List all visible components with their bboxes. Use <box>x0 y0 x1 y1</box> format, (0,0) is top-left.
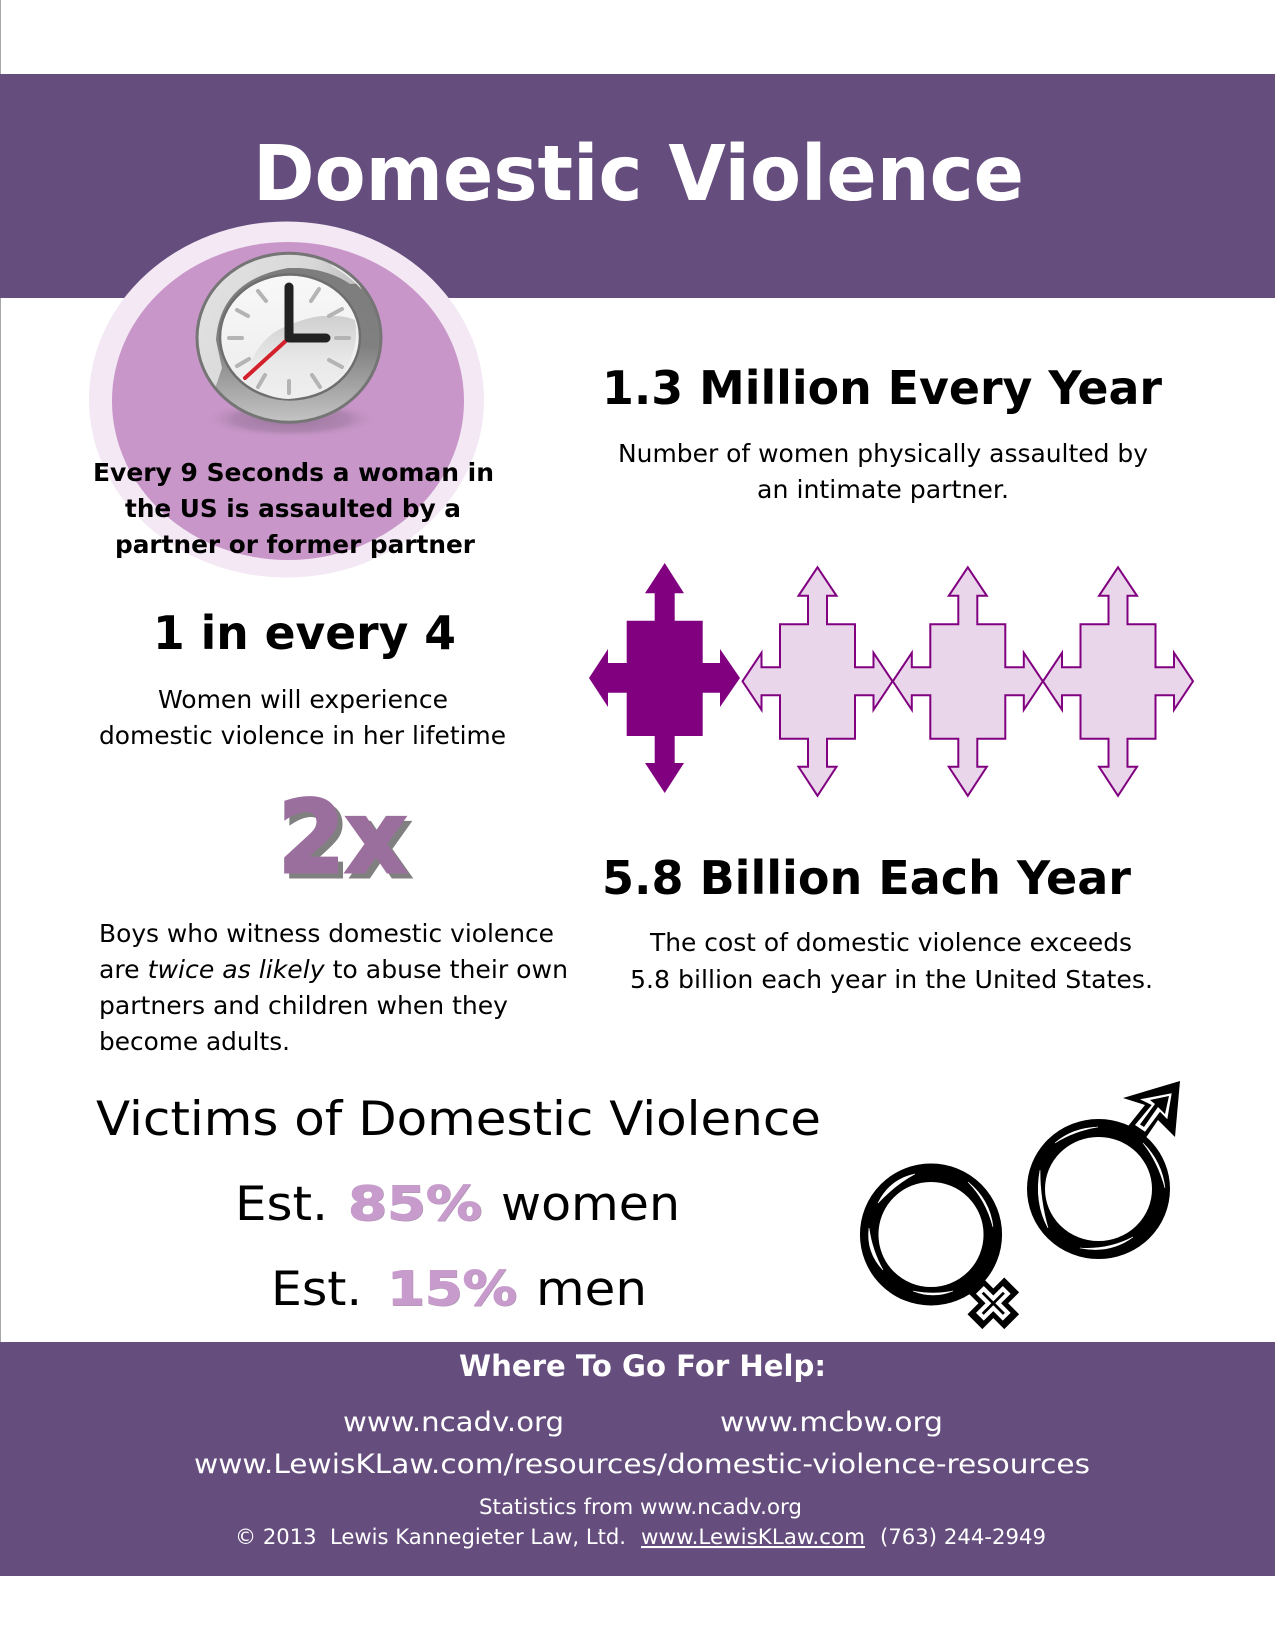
stat: women: Est. <box>235 1177 328 1232</box>
statistics source and copyright <box>235 1495 1046 1549</box>
description: are twice as likely to abuse their own <box>99 955 568 984</box>
every 9 seconds text: Every 9 Seconds a woman in <box>93 458 494 487</box>
description <box>618 439 1148 504</box>
page left edge line <box>0 0 1 1342</box>
stat: men: Est. <box>271 1262 362 1317</box>
description: Number of women physically assaulted by <box>618 439 1148 468</box>
help links: www.mcbw.org <box>720 1407 943 1438</box>
icon: light cross 1 <box>742 567 892 796</box>
stat: men: 15% <box>388 1263 518 1318</box>
description: Women will experience <box>158 685 448 714</box>
heading: 5.8 Billion Each Year <box>602 851 1131 905</box>
description: 5.8 billion each year in the United States. <box>630 965 1153 994</box>
chart: four arrow crosses, one in four <box>589 563 1193 796</box>
panel: every 9 seconds <box>89 222 494 578</box>
icon: female symbol <box>869 1173 1030 1340</box>
icon: light cross 3 <box>1043 567 1193 796</box>
description <box>630 928 1153 994</box>
description: Boys who witness domestic violence <box>99 919 554 948</box>
stat: women: 85% <box>349 1178 483 1233</box>
panel: victims <box>96 1092 821 1318</box>
help links: www.ncadv.org <box>343 1407 564 1438</box>
icon: dark cross <box>589 563 740 793</box>
description: domestic violence in her lifetime <box>99 721 506 750</box>
statistics source and copyright: (763) 244-2949 <box>880 1525 1046 1549</box>
panel: 2x <box>99 779 568 1056</box>
description: partners and children when they <box>99 991 508 1020</box>
outer halo ellipse <box>89 222 484 578</box>
icon: light cross 2 <box>893 567 1043 796</box>
description <box>99 685 506 750</box>
heading: 1.3 Million Every Year <box>602 361 1162 415</box>
every 9 seconds text: partner or former partner <box>115 530 476 559</box>
every 9 seconds text: the US is assaulted by a <box>125 494 461 523</box>
statistics source and copyright: Statistics from www.ncadv.org <box>479 1495 802 1519</box>
every 9 seconds text <box>93 458 494 559</box>
inner purple ellipse <box>112 242 464 560</box>
stat: women <box>235 1177 680 1233</box>
footer band <box>0 1342 1275 1576</box>
stat: women: 85% <box>348 1177 482 1232</box>
panel: 5.8 billion <box>602 851 1153 994</box>
description: an intimate partner. <box>757 475 1009 504</box>
title: Domestic Violence <box>253 130 1024 219</box>
statistics source and copyright: © 2013 Lewis Kannegieter Law, Ltd. <box>235 1525 626 1549</box>
footer heading: Where To Go For Help: <box>459 1349 826 1383</box>
panel: 1.3 million <box>602 361 1162 504</box>
help links: www.LewisKLaw.com/resources/domestic-violence-resources <box>194 1449 1090 1480</box>
big 2x: 2x <box>278 779 407 896</box>
stat: men: 15% <box>387 1262 517 1317</box>
description: become adults. <box>99 1027 290 1056</box>
header band <box>0 74 1275 298</box>
stat: women: women <box>501 1177 680 1232</box>
description: The cost of domestic violence exceeds <box>649 928 1132 957</box>
heading: Victims of Domestic Violence <box>96 1092 821 1147</box>
icon: clock <box>196 252 382 434</box>
statistics source and copyright: www.LewisKLaw.com <box>641 1525 865 1549</box>
stat: men <box>271 1262 647 1318</box>
panel: 1 in every 4 <box>99 606 506 750</box>
heading: 1 in every 4 <box>153 606 456 660</box>
icon: male symbol <box>1036 1081 1180 1250</box>
help links <box>194 1407 1090 1480</box>
big 2x: 2x <box>283 784 412 901</box>
description <box>99 919 568 1056</box>
stat: men: men <box>536 1262 647 1317</box>
